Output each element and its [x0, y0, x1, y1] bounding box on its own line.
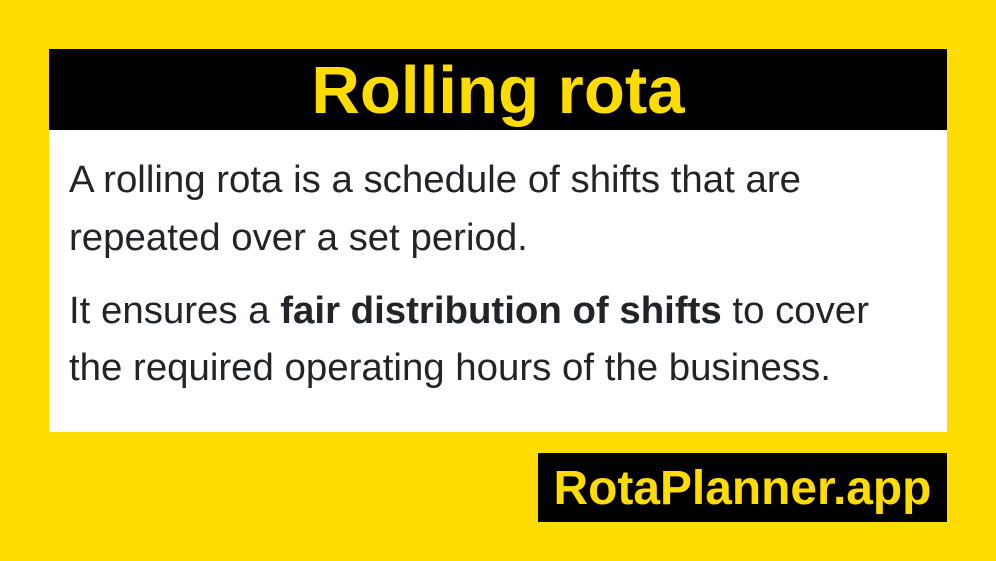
text block: purpose — [69, 289, 869, 389]
text block: purpose: the required operating hours of the business. — [69, 346, 831, 389]
title: Rolling rota — [311, 53, 685, 128]
text block: definition: repeated over a set period. — [69, 216, 528, 259]
brand badge: RotaPlanner.app — [554, 462, 931, 515]
text block: definition — [69, 158, 801, 259]
title — [49, 49, 947, 130]
text block: definition: A rolling rota is a schedule of shifts that are — [69, 158, 801, 201]
text block: purpose: It ensures a fair distribution of shifts to cover — [69, 289, 869, 332]
panel: main card — [49, 49, 947, 432]
